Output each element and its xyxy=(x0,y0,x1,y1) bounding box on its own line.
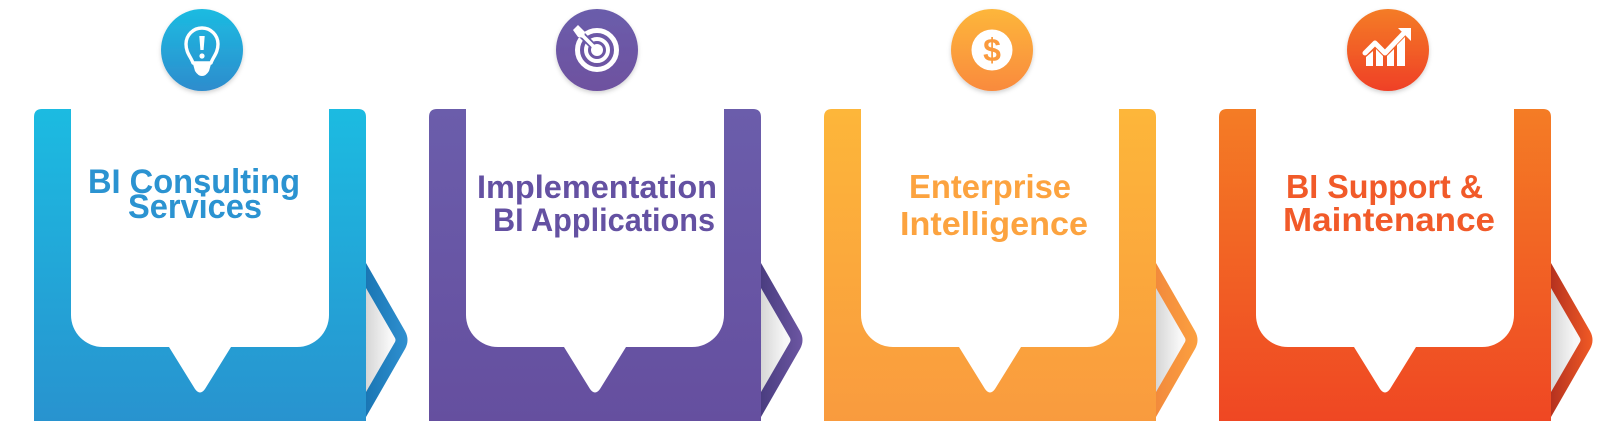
heading: BI Support & Maintenance: BI Support & xyxy=(1286,168,1483,205)
arrow: panel 3 xyxy=(1156,263,1198,417)
icon: dollar coin: $ xyxy=(983,32,1001,68)
card frame: panel 4 xyxy=(1219,109,1551,421)
panel: BI Consulting Services xyxy=(34,9,408,421)
heading: Enterprise Intelligence: Intelligence xyxy=(900,205,1088,242)
heading: BI Support & Maintenance xyxy=(1283,168,1495,238)
panel: Implementation BI Applications xyxy=(429,9,802,421)
heading: Enterprise Intelligence: Enterprise xyxy=(909,168,1071,205)
panel: BI Support & Maintenance xyxy=(1219,9,1592,421)
heading: BI Consulting Services: BI Consulting xyxy=(88,163,300,201)
arrow: panel 2 xyxy=(761,263,802,417)
heading: BI Consulting Services: Services xyxy=(128,188,262,226)
heading: Enterprise Intelligence xyxy=(900,168,1088,242)
icon: dollar coin xyxy=(951,9,1033,91)
icon: target xyxy=(556,9,638,91)
heading: BI Consulting Services xyxy=(88,163,300,226)
heading: Implementation BI Applications xyxy=(477,169,717,238)
arrow: panel 1 xyxy=(366,263,408,417)
arrow: panel 4 xyxy=(1551,263,1592,417)
icon: growth chart xyxy=(1347,9,1429,91)
panel: Enterprise Intelligence xyxy=(824,9,1198,421)
heading: Implementation BI Applications: BI Applications xyxy=(493,202,715,238)
heading: BI Support & Maintenance: Maintenance xyxy=(1283,201,1495,238)
card frame: panel 2 xyxy=(429,109,761,421)
icon: light bulb xyxy=(161,9,243,91)
card frame: panel 3 xyxy=(824,109,1156,421)
heading: Implementation BI Applications: Implementation xyxy=(477,169,717,205)
card frame: panel 1 xyxy=(34,109,366,421)
